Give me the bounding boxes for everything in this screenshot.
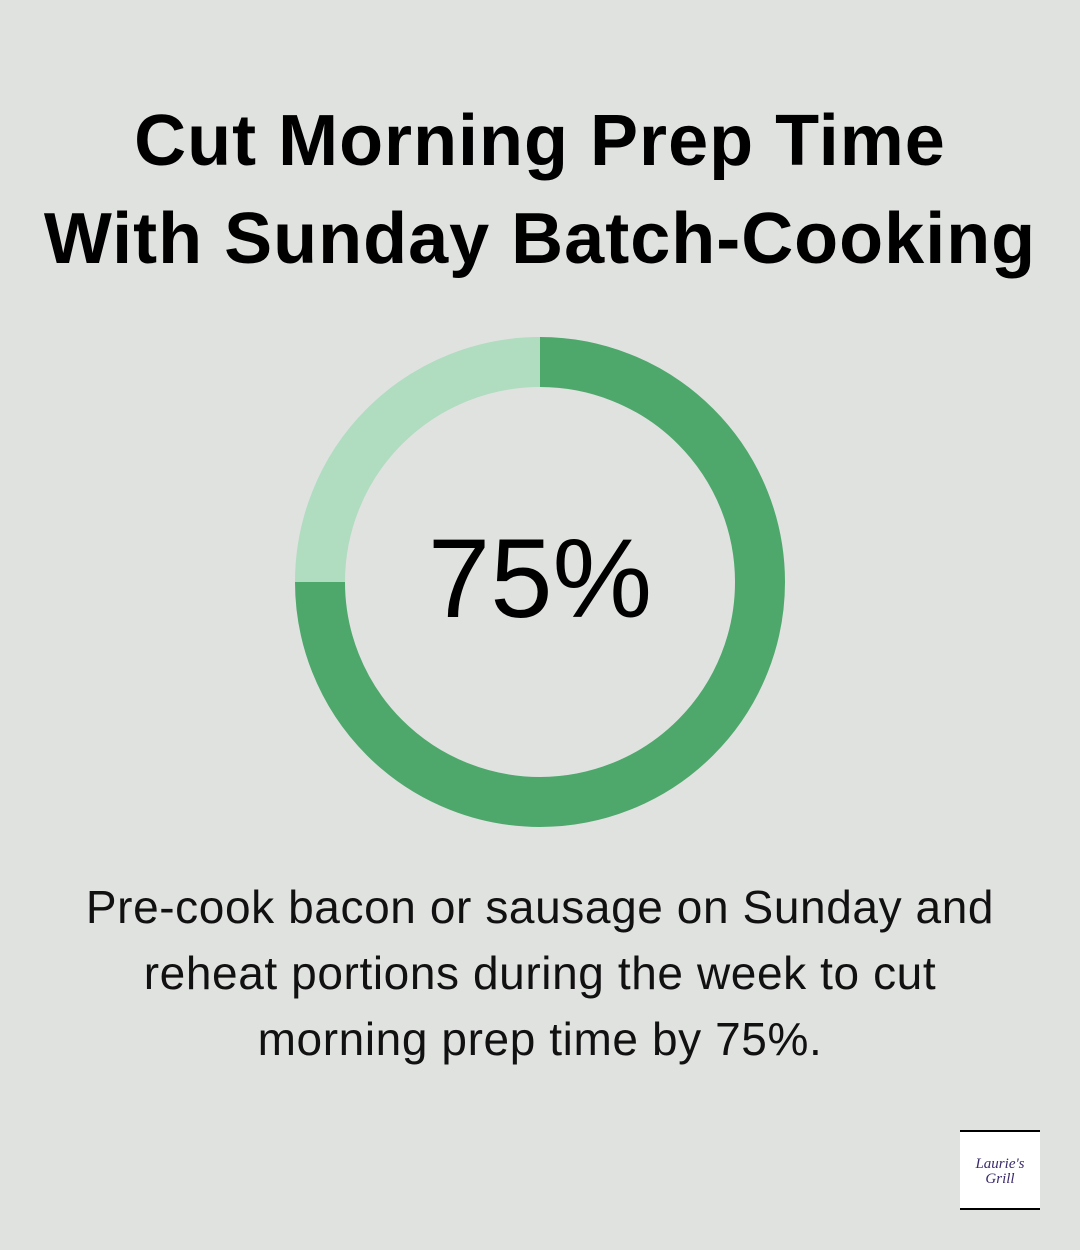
description text: morning prep time by 75%. [258, 1013, 822, 1065]
logo: Laurie's [975, 1156, 1025, 1172]
title [44, 101, 1036, 279]
description text [86, 881, 994, 1065]
dark segment 75% [320, 362, 760, 802]
center value: 75% [428, 516, 652, 641]
description text: reheat portions during the week to cut [144, 947, 936, 999]
title: Cut Morning Prep Time [134, 101, 946, 181]
light segment [320, 362, 540, 582]
description text: Pre-cook bacon or sausage on Sunday and [86, 881, 994, 933]
title: With Sunday Batch-Cooking [44, 199, 1036, 279]
logo [960, 1130, 1040, 1210]
logo: Grill [985, 1171, 1015, 1187]
